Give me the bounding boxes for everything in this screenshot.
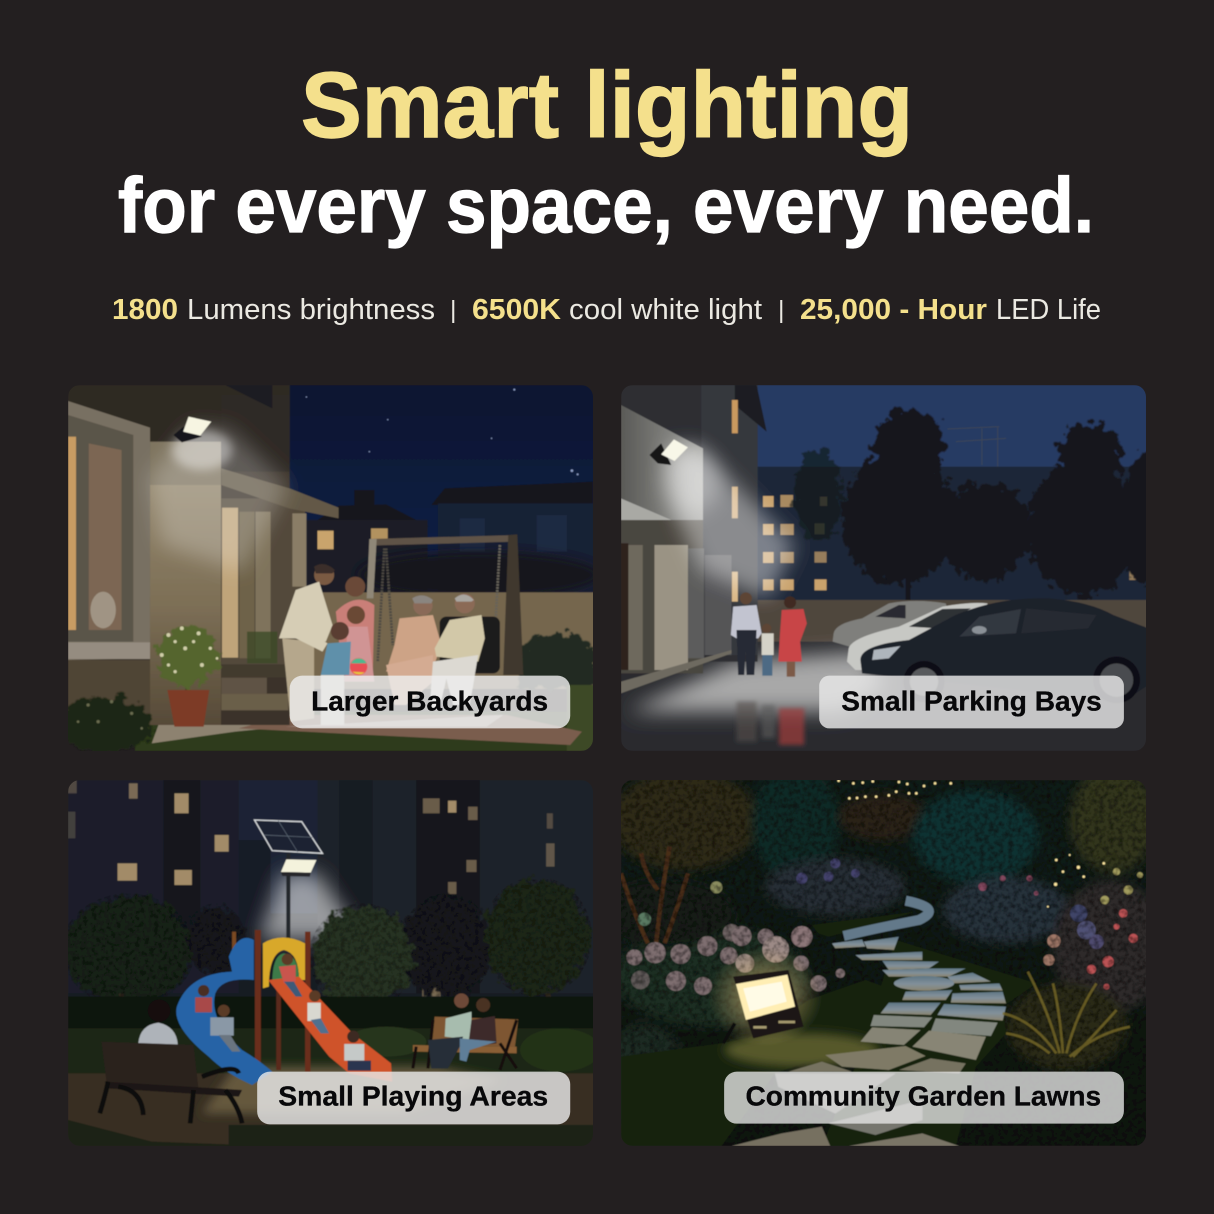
title: [118, 53, 1094, 249]
family: [279, 564, 485, 725]
bench with seated person: [100, 999, 242, 1123]
boundary wall: [312, 592, 595, 689]
playground: [176, 930, 392, 1085]
ground: [621, 642, 1148, 751]
heading: Smart lighting: Smart lighting: [301, 53, 913, 157]
icon: glowing floodlight: [708, 947, 822, 1047]
window: [68, 401, 150, 725]
yellow tower: [263, 937, 305, 988]
bench with couple: [413, 993, 518, 1070]
house wall: [68, 385, 290, 725]
label: Small Parking Bays: [819, 676, 1124, 728]
panel: Larger Backyards: [58, 385, 600, 753]
specification line: Lumens brightness: [187, 294, 435, 326]
solar street light: [254, 820, 322, 940]
specification line: 1800: [112, 294, 178, 326]
woman standing: [345, 577, 365, 597]
specification line: LED Life: [996, 294, 1101, 326]
hedge: [517, 633, 597, 688]
panel: Community Garden Lawns: [594, 767, 1167, 1146]
antenna: [948, 426, 1006, 466]
frame: [255, 930, 261, 1063]
stone path: [731, 901, 1006, 1146]
garden background: [621, 780, 1148, 1146]
reflections: [737, 702, 804, 745]
tree trunks: [621, 847, 688, 943]
label: Small Playing Areas: Small Playing Areas: [278, 1080, 548, 1111]
specification line: 6500K: [472, 294, 561, 326]
night sky: [290, 385, 593, 558]
light beam: [148, 425, 289, 572]
icon: wall floodlight: [173, 417, 211, 442]
porch: [221, 468, 339, 710]
boy: [331, 622, 349, 640]
girl: [347, 606, 365, 624]
family: [731, 592, 807, 677]
potted plant: [155, 626, 219, 727]
distant flowers: [796, 858, 1143, 990]
specification line: cool white light: [569, 294, 762, 326]
sky and buildings: [68, 780, 593, 998]
parked cars: [833, 598, 1148, 703]
ball: [350, 658, 367, 675]
specification line: 25,000 - Hour: [800, 294, 987, 326]
distant houses: [306, 482, 600, 598]
heading: for every space, every need.: for every space, every need.: [118, 161, 1094, 249]
label: Small Playing Areas: [257, 1072, 570, 1124]
string lights: [837, 779, 1105, 908]
apartment block behind: [758, 467, 1148, 600]
grandfather: [455, 593, 475, 613]
hydrangeas: [626, 881, 1104, 1095]
trees: [65, 880, 589, 1040]
label: Larger Backyards: Larger Backyards: [311, 685, 548, 716]
dark sedan: [860, 598, 1148, 702]
foliage mottling: [621, 780, 1146, 1146]
label: Community Garden Lawns: Community Garden Lawns: [746, 1080, 1101, 1111]
blue slide: [176, 938, 272, 1085]
lawn and hedge: [68, 997, 600, 1148]
label: Community Garden Lawns: [724, 1072, 1124, 1124]
shrub: [58, 697, 152, 753]
specification line: |: [450, 296, 456, 324]
trees: [795, 408, 1163, 595]
father: [313, 570, 335, 586]
panel: Small Playing Areas: [65, 780, 600, 1148]
panel: Small Parking Bays: [621, 385, 1163, 751]
foliage masses: [594, 767, 1167, 1137]
label: Larger Backyards: [290, 676, 570, 728]
dusk sky: [757, 385, 1146, 468]
red slide: [268, 977, 392, 1082]
light beam: [259, 873, 363, 940]
label: Small Parking Bays: Small Parking Bays: [841, 685, 1102, 716]
swing: [367, 534, 523, 675]
specification line: [112, 294, 1101, 326]
fern: [1003, 972, 1130, 1057]
lawn and patio: [135, 685, 595, 751]
grandmother: [413, 603, 433, 616]
foliage mottling: [68, 880, 593, 1013]
kids: [282, 954, 293, 965]
icon: wall floodlight: [649, 439, 688, 465]
building: [621, 385, 767, 693]
tree trunk: [906, 578, 910, 600]
lawn: [621, 912, 1036, 1146]
boundary wall: [757, 599, 1146, 642]
light beam: [663, 445, 795, 598]
specification line: |: [778, 296, 784, 324]
